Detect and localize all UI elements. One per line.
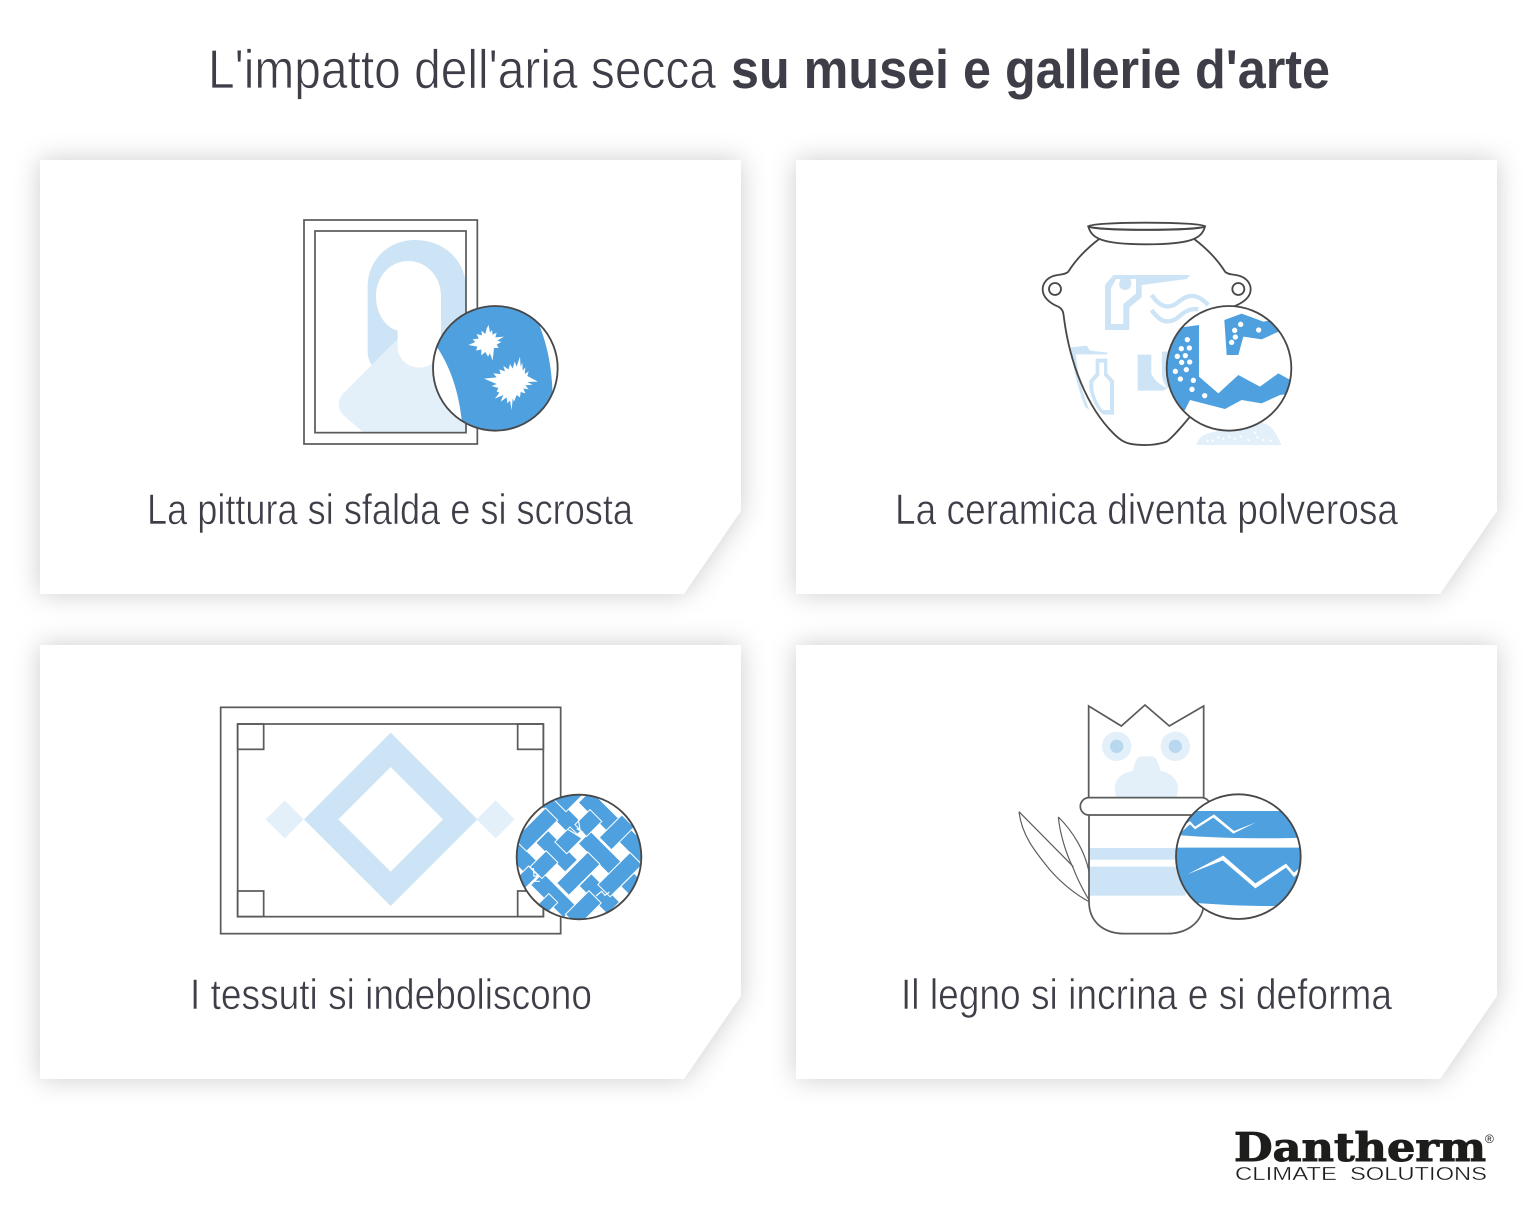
icon: painting with flaking paint (304, 220, 558, 444)
panel: painting (40, 160, 741, 594)
icon: wooden statue with cracks (1019, 705, 1303, 934)
panel: textiles (40, 645, 741, 1079)
logo: Dantherm Climate Solutions: ® (1485, 1132, 1494, 1146)
icon: vase with powdery ceramic (1043, 223, 1293, 445)
logo: Dantherm Climate Solutions (1234, 1125, 1494, 1184)
magnifier: cracked wood (1173, 794, 1303, 919)
panel: ceramics (796, 160, 1497, 594)
magnifier: weave (516, 794, 642, 920)
logo: Dantherm Climate Solutions: Dantherm (1234, 1125, 1486, 1171)
title: L'impatto dell'aria secca (208, 38, 716, 100)
logo: Dantherm Climate Solutions: SOLUTIONS (1350, 1164, 1487, 1184)
magnifier: flaking paint (430, 300, 558, 437)
caption: La ceramica diventa polverosa (895, 486, 1398, 534)
title: su musei e gallerie d'arte (731, 38, 1330, 100)
icon: rug with weakened weave (221, 707, 652, 934)
panel: wood (796, 645, 1497, 1079)
caption: I tessuti si indeboliscono (190, 971, 592, 1019)
title (208, 38, 1330, 100)
logo: Dantherm Climate Solutions: CLIMATE (1235, 1164, 1337, 1184)
magnifier: powdery ceramic (1163, 306, 1293, 431)
caption: Il legno si incrina e si deforma (901, 971, 1392, 1019)
caption: La pittura si sfalda e si scrosta (147, 486, 633, 534)
